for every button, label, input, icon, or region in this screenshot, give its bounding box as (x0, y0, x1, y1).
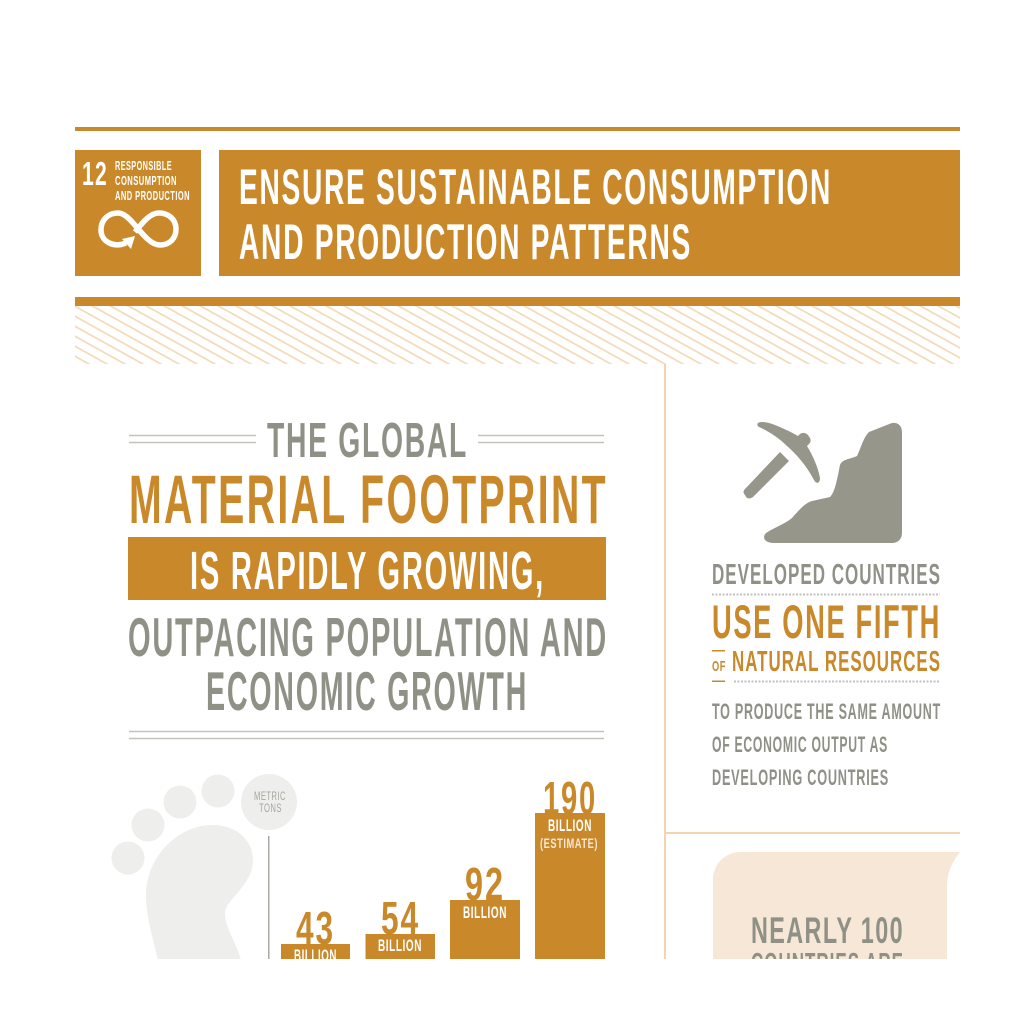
goal name (115, 158, 190, 203)
bar: 43 billion: BILLION (294, 946, 337, 965)
heading: material footprint: MATERIAL FOOTPRINT (129, 461, 608, 538)
top rule (75, 127, 960, 131)
callout: of natural resources (712, 650, 940, 682)
bar: 92 billion: BILLION (463, 903, 507, 922)
subheading (129, 618, 605, 710)
bar chart (281, 772, 605, 965)
panel: nearly 100 countries (713, 852, 960, 959)
metric tons badge (241, 774, 297, 830)
metric tons badge: TONS (259, 801, 282, 815)
goal name: AND PRODUCTION (115, 188, 190, 203)
bar: 92 billion (450, 868, 520, 959)
bar: 43 billion: 43 (296, 902, 335, 954)
bar: 54 billion (366, 902, 435, 959)
text block: developed countries (712, 559, 941, 790)
panel: nearly 100 countries: NEARLY 100 (751, 910, 904, 951)
bar: 54 billion: 54 (381, 892, 420, 944)
thick rule (75, 297, 960, 306)
bar: 190 billion estimate (535, 772, 605, 960)
heading band: IS RAPIDLY GROWING, (190, 541, 545, 601)
bar: 190 billion estimate: 190 (543, 772, 597, 824)
metric tons badge: METRIC (254, 789, 286, 803)
heading band (128, 537, 606, 601)
icon: infinity loop (101, 213, 176, 249)
bar: 43 billion (281, 912, 350, 959)
callout: of natural resources: OF (712, 658, 726, 675)
goal 12 badge (75, 150, 201, 276)
body text: OF ECONOMIC OUTPUT AS (712, 732, 888, 757)
bar: 54 billion: BILLION (378, 936, 422, 955)
horizontal divider (665, 832, 960, 834)
icon: footprint (112, 774, 253, 960)
icon: pickaxe and mountain (744, 422, 902, 543)
panel: nearly 100 countries: COUNTRIES ARE (751, 948, 904, 980)
heading: the global: THE GLOBAL (267, 414, 468, 468)
subheading: ECONOMIC GROWTH (206, 660, 528, 722)
subheading: OUTPACING POPULATION AND (128, 606, 608, 668)
bar: 92 billion: 92 (465, 858, 505, 910)
bar: 190 billion estimate: BILLION (548, 816, 592, 835)
vertical divider (664, 364, 666, 960)
chart axis (268, 836, 270, 960)
body text (712, 704, 940, 785)
title banner (219, 150, 960, 276)
goal name: RESPONSIBLE (115, 158, 172, 173)
panel: headline (128, 414, 608, 738)
title banner: AND PRODUCTION PATTERNS (239, 214, 692, 270)
goal name: CONSUMPTION (115, 173, 177, 188)
bar: 190 billion estimate: (ESTIMATE) (540, 835, 598, 851)
goal number: 12 (82, 155, 108, 192)
body text: DEVELOPING COUNTRIES (712, 765, 889, 790)
